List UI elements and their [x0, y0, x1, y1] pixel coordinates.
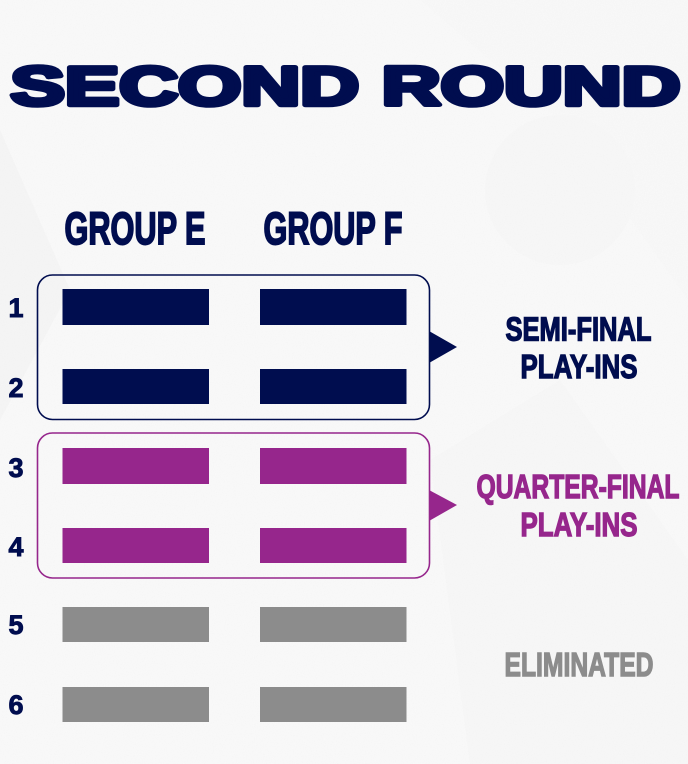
arrow: to quarter-final play-ins: [429, 490, 457, 521]
label: semi-final play-ins: PLAY-INS: [520, 349, 638, 386]
rank numbers: [8, 293, 24, 720]
navy slots: [62, 289, 406, 404]
heading: group E: GROUP E: [64, 203, 206, 254]
heading: group F: GROUP F: [264, 203, 402, 254]
panel: quarter-final qualifiers: [38, 433, 457, 578]
rank numbers: 2: [8, 373, 24, 403]
rank numbers: 4: [8, 532, 24, 562]
label: quarter-final play-ins: [476, 469, 680, 544]
purple slots: [62, 448, 406, 563]
label: semi-final play-ins: [506, 312, 652, 386]
arrow: to semi-final play-ins: [429, 331, 457, 363]
title: SECOND ROUND: [10, 55, 680, 117]
rank numbers: 6: [8, 690, 24, 720]
panel: semi-final qualifiers: [38, 275, 457, 420]
rank numbers: 1: [8, 293, 24, 323]
eliminated slots: [62, 607, 406, 722]
label: quarter-final play-ins: PLAY-INS: [520, 507, 638, 544]
rank numbers: 5: [8, 610, 24, 640]
rank numbers: 3: [8, 453, 24, 483]
